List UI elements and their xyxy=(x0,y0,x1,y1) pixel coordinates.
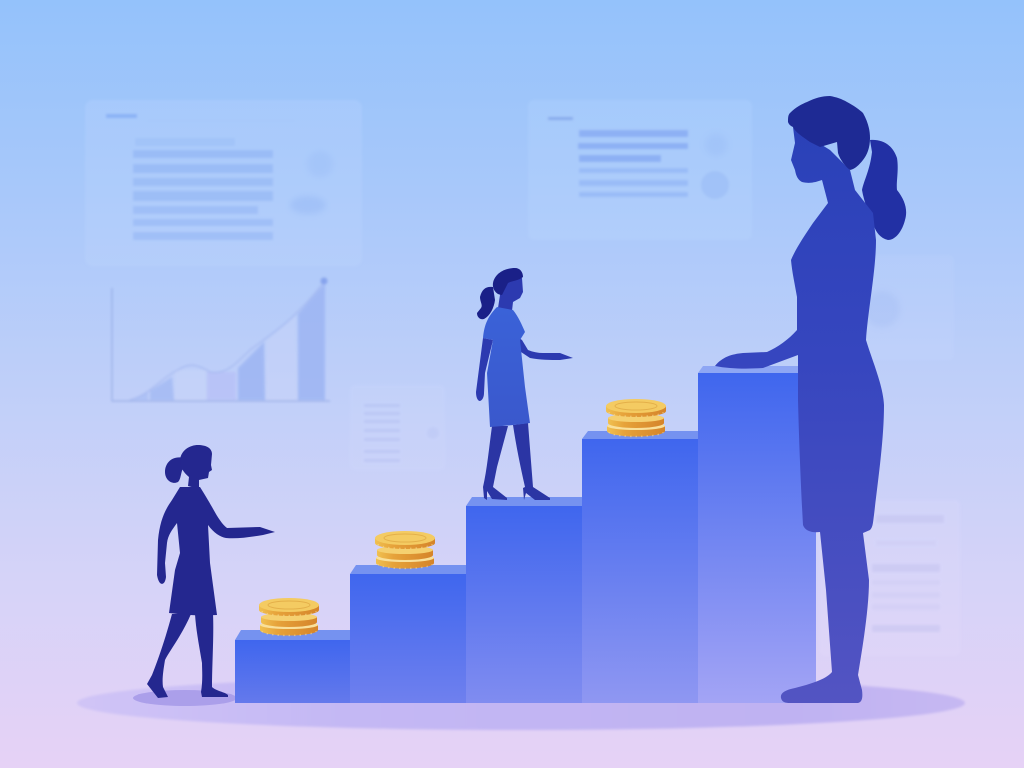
ponytail xyxy=(477,287,495,319)
coin stack 1 xyxy=(259,598,319,636)
body and skirt xyxy=(157,487,275,615)
ponytail xyxy=(165,457,186,483)
body with arm and skirt xyxy=(715,127,884,703)
head and hair xyxy=(180,445,212,489)
coin stack 3 xyxy=(606,399,666,436)
panel: upper left document xyxy=(85,100,362,266)
step 2 xyxy=(350,565,466,703)
chart end marker xyxy=(320,278,328,284)
step 1 xyxy=(235,630,350,703)
faint panel: centre xyxy=(350,385,445,470)
step 4 xyxy=(582,431,698,703)
faint panel: right middle xyxy=(862,255,954,360)
back leg and shoe xyxy=(483,426,508,500)
platform ellipse xyxy=(77,676,965,730)
figure: woman on the third step xyxy=(476,268,573,500)
faint panel: lower right xyxy=(820,500,960,655)
chart trend line xyxy=(130,282,324,400)
coin stack 2 xyxy=(375,531,435,568)
ponytail xyxy=(862,140,906,240)
neck and face xyxy=(498,278,523,311)
left foot shadow xyxy=(133,690,237,706)
back leg xyxy=(147,614,191,698)
dress xyxy=(483,307,530,427)
step 5 xyxy=(698,366,816,703)
step 3 xyxy=(466,497,582,703)
hair xyxy=(788,96,870,170)
line and bar chart xyxy=(112,278,330,401)
stairs xyxy=(235,366,816,703)
back arm xyxy=(476,338,493,401)
front leg xyxy=(195,614,228,697)
figure: large woman at the top xyxy=(715,96,906,703)
front leg and shoe xyxy=(513,423,550,500)
chart axes xyxy=(112,288,330,401)
front arm xyxy=(516,336,573,360)
chart bars xyxy=(130,283,325,400)
panel: upper middle document xyxy=(528,100,752,240)
hair xyxy=(493,268,523,295)
figure: small woman on the ground xyxy=(147,445,275,698)
